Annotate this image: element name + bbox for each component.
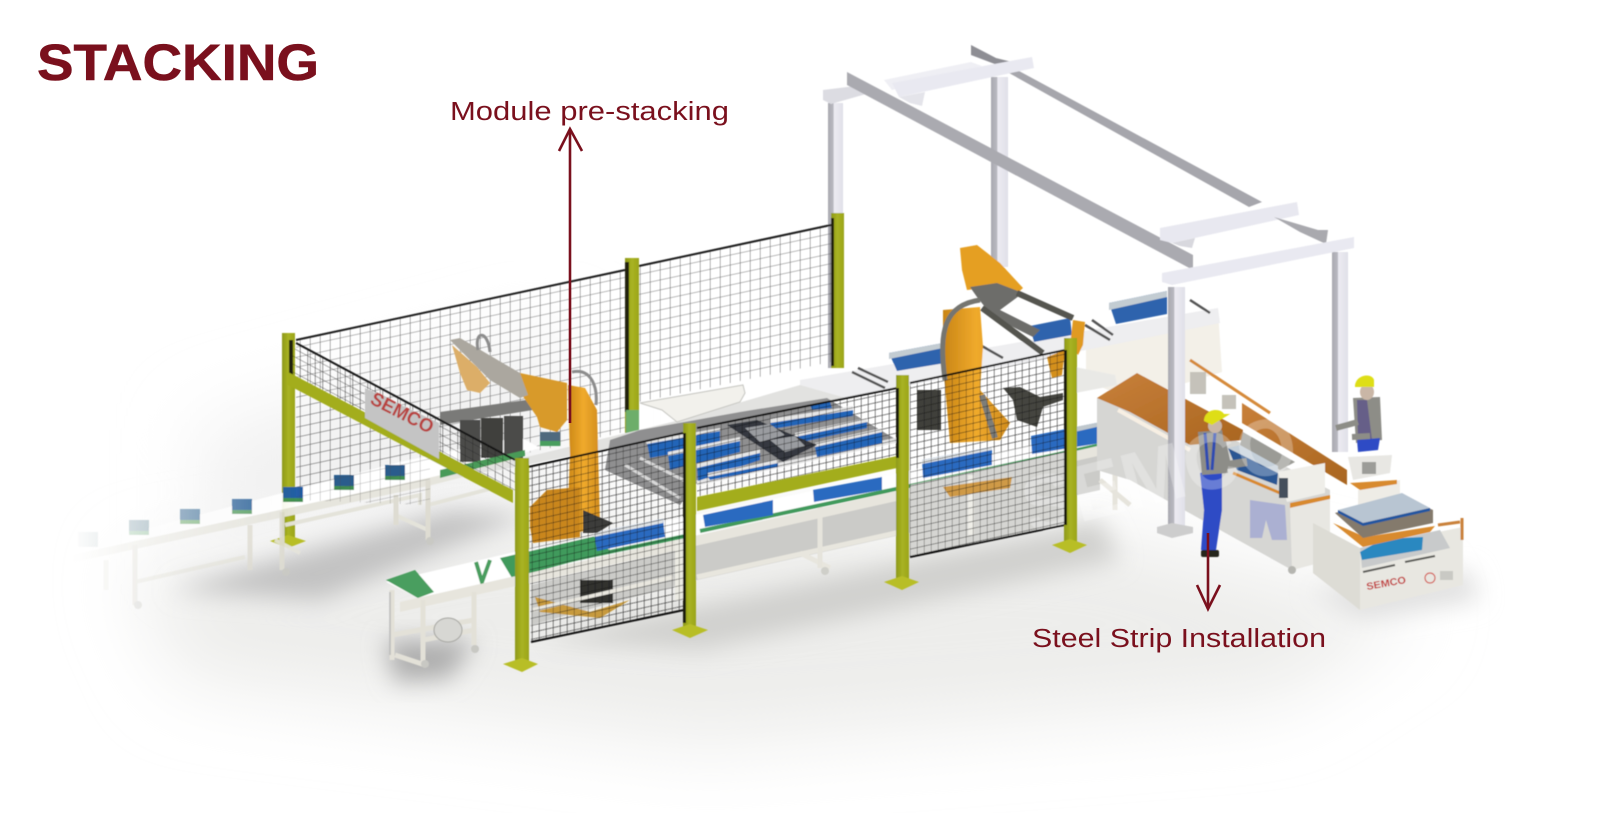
tray left rails [625, 458, 695, 498]
long beam rear [1009, 71, 1262, 207]
torso [1353, 397, 1382, 443]
front mesh a [528, 433, 684, 642]
arrow: module pre-stacking [559, 129, 582, 423]
watermark: SEMCO [1013, 397, 1306, 551]
gantry rear post [991, 77, 1008, 267]
left fence [288, 343, 515, 505]
green belt mid [500, 535, 610, 578]
cabinet under back conveyor [1086, 310, 1222, 400]
picked module [540, 432, 560, 446]
casters [134, 537, 434, 609]
arrow: steel strip installation [1197, 533, 1220, 609]
orange plate [1290, 495, 1330, 508]
back mesh left [296, 270, 625, 502]
arm [1336, 422, 1370, 437]
panel [1440, 571, 1453, 580]
short left cross [823, 85, 880, 104]
long beam front [847, 72, 1193, 270]
right robot [910, 245, 1117, 557]
sign [365, 388, 439, 459]
gantry frame [823, 45, 1354, 452]
gripper [1003, 387, 1063, 427]
straps [1205, 432, 1215, 470]
back conveyor strip [800, 308, 1220, 405]
left gripper [917, 390, 941, 430]
white leg [968, 475, 974, 535]
robot arm [960, 245, 1023, 300]
left mesh lower [296, 380, 430, 505]
post rear right [831, 213, 844, 368]
indicator ring [1425, 573, 1435, 583]
lower parts [533, 540, 683, 610]
cabinet [1290, 499, 1330, 570]
input legs [106, 480, 428, 605]
post front d [1052, 338, 1087, 553]
back conveyor [440, 291, 1222, 478]
battery stack two [1109, 291, 1167, 324]
title: STACKING [37, 34, 319, 91]
apron [1357, 400, 1372, 440]
mechanism slot [1240, 432, 1295, 470]
rollers [852, 300, 1210, 388]
machine body [1097, 390, 1330, 570]
post rear centre [625, 258, 639, 434]
left top rail [296, 343, 515, 460]
gripper [727, 420, 817, 462]
post front c [884, 375, 919, 590]
slots [1363, 556, 1435, 572]
cable loop [477, 335, 596, 405]
front mesh a frame [528, 433, 684, 642]
front mesh c [910, 350, 1065, 557]
robot body [943, 307, 1010, 443]
torso [1198, 430, 1228, 475]
screen [1279, 478, 1288, 498]
cart opening [1360, 530, 1450, 568]
worker right [1336, 376, 1382, 452]
input lower rail [135, 485, 505, 582]
orange clamp plate [1350, 480, 1397, 490]
sign text: SEMCO [367, 389, 437, 438]
batteries in machine [1228, 448, 1278, 485]
left beam [288, 372, 513, 503]
belt [386, 432, 1118, 598]
trousers [1357, 438, 1380, 452]
yellow crossbar [697, 456, 897, 511]
casters [421, 645, 479, 668]
top end stub [971, 45, 1012, 66]
wrist [1070, 320, 1085, 355]
battery array [1338, 493, 1430, 523]
mid crossbeam lip [1172, 238, 1195, 248]
robot gripper frame [440, 398, 545, 478]
clamp centre [1362, 462, 1376, 474]
floor reflection [943, 477, 1012, 497]
stacking tray [605, 398, 897, 505]
robot column [567, 385, 600, 535]
thin rear crossbeam [884, 62, 982, 90]
side table end [1065, 367, 1117, 395]
front mesh b [697, 388, 897, 497]
input rail [122, 458, 514, 550]
robot tool [583, 510, 613, 533]
infographic canvas [38, 44, 1481, 750]
AGV cart [1313, 493, 1463, 610]
input belt [180, 438, 540, 524]
front conveyor frame [390, 590, 479, 668]
front mesh c frame [910, 350, 1065, 557]
gantry left post [828, 103, 843, 368]
green leaf mark [476, 560, 490, 582]
linkage bars [970, 283, 1073, 353]
gantry front post [1157, 287, 1193, 538]
white wood strip [1118, 410, 1190, 450]
hard hat [1204, 410, 1230, 425]
green belt strips [510, 443, 1110, 573]
back mesh right [639, 225, 831, 402]
upper wood beam [1242, 403, 1347, 485]
forearm lower [1047, 350, 1065, 378]
cart shadow face [1313, 523, 1360, 610]
legs [1200, 470, 1222, 550]
mid crossbeam [1160, 202, 1299, 243]
upper wood thin rail [1190, 360, 1270, 413]
battery stack one [889, 343, 945, 371]
hard hat [1355, 376, 1374, 387]
orange machine edge [1233, 473, 1280, 493]
handle [1438, 518, 1462, 540]
tray [1335, 495, 1433, 538]
left mesh [288, 343, 515, 497]
array blue edge [1338, 508, 1430, 526]
table legs [820, 445, 1130, 568]
blue battery modules [594, 422, 1101, 551]
clamp device [1348, 455, 1392, 480]
control cabinet top [1278, 463, 1325, 502]
tray front rail [697, 440, 897, 483]
column under right machine [1358, 480, 1400, 535]
shoes [1201, 550, 1219, 557]
label: steel strip installation: Steel Strip Installation [1032, 625, 1326, 653]
post rear left [270, 333, 306, 548]
caster [1288, 566, 1296, 574]
battery stack middle [1030, 318, 1072, 342]
arm [1222, 442, 1247, 465]
lower rail [697, 532, 900, 577]
post front b [672, 423, 708, 638]
worker left [1198, 410, 1247, 557]
front mesh b frame [697, 388, 897, 428]
motor [434, 618, 462, 642]
blue stand [1360, 537, 1423, 560]
left robot [440, 335, 683, 618]
front fence [503, 338, 1087, 672]
head [1360, 384, 1374, 400]
head [1208, 419, 1222, 433]
white hopper [640, 385, 745, 422]
clamp boxes [1190, 372, 1236, 409]
top crossbeam [892, 57, 1034, 97]
cart body [1313, 523, 1463, 610]
top crossbeam lip [899, 92, 925, 106]
orange plate [1333, 523, 1435, 547]
post front a [503, 458, 538, 672]
back fence [270, 213, 844, 548]
robot upper arm [520, 373, 567, 432]
back table strip [440, 385, 846, 478]
beam end stub [1274, 217, 1328, 244]
cart logo: SEMCO [1366, 575, 1407, 593]
blue rows [645, 402, 882, 481]
back rail top [296, 225, 831, 340]
main stacking table [386, 422, 1130, 668]
cable [943, 300, 980, 380]
lower wood beam [1097, 373, 1243, 445]
floor shading [130, 330, 1480, 745]
robot base [530, 487, 580, 543]
tray body [605, 398, 897, 505]
robot wrist [452, 345, 490, 393]
module boxes [78, 465, 405, 547]
label: module pre-stacking: Module pre-stacking [450, 98, 729, 126]
input conveyor [66, 437, 540, 609]
body cable [982, 395, 995, 438]
gantry right post [1332, 252, 1348, 452]
grey under panel [531, 448, 1100, 625]
table front rail [400, 441, 1120, 612]
reflected trousers [1250, 500, 1287, 540]
steel strip machine [1097, 287, 1400, 574]
lower panel behind fence [910, 452, 1065, 557]
caster [821, 567, 829, 575]
robot forearm [450, 338, 528, 398]
green belt start [386, 570, 434, 598]
front crossbeam [1162, 237, 1354, 285]
robot base reflection [535, 597, 630, 618]
